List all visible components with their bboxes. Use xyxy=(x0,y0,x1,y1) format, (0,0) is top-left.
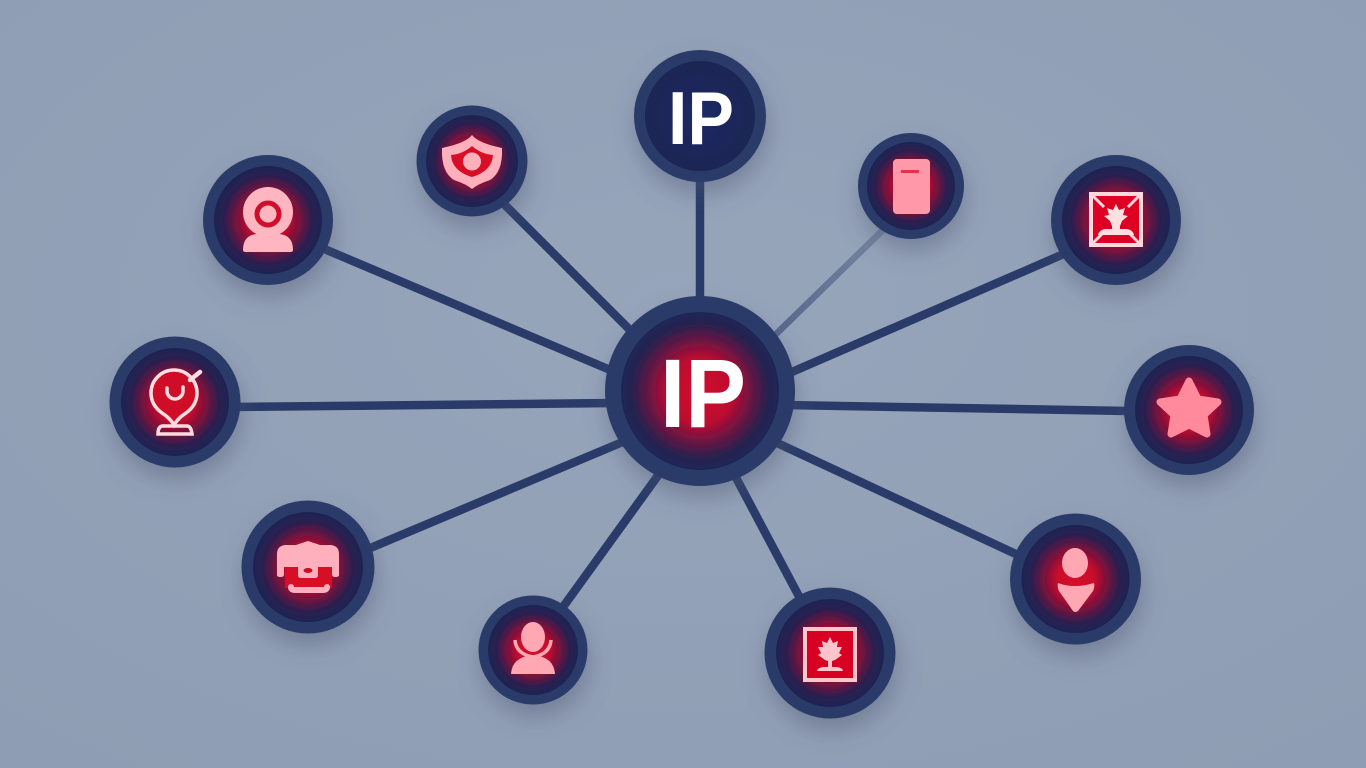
node: briefcase xyxy=(242,500,374,634)
icon: webcam xyxy=(243,187,293,252)
top IP node: IP xyxy=(668,76,734,160)
icon: framed plant xyxy=(805,629,855,680)
icon: person pin xyxy=(1058,548,1094,612)
node: framed box xyxy=(1051,155,1181,285)
central IP hub: IP xyxy=(660,339,746,448)
node: webcam xyxy=(203,155,333,285)
icon: framed plant with corners xyxy=(1091,194,1141,245)
node: person with arms xyxy=(478,596,588,704)
top IP node xyxy=(634,50,766,182)
central IP hub xyxy=(605,296,795,486)
node: shield xyxy=(416,106,528,216)
node: framed plant xyxy=(764,588,896,718)
connector lines xyxy=(236,175,1128,607)
icon: shield xyxy=(442,135,502,189)
icon: person with raised arms xyxy=(511,622,555,674)
icon: briefcase xyxy=(277,541,339,590)
icon: star xyxy=(1160,381,1218,434)
icon: location pin xyxy=(151,370,200,434)
icon: card xyxy=(893,159,930,214)
node: star xyxy=(1124,345,1254,475)
node: person pin xyxy=(1010,514,1141,644)
node: location pin xyxy=(110,336,240,468)
node: card xyxy=(858,133,964,239)
